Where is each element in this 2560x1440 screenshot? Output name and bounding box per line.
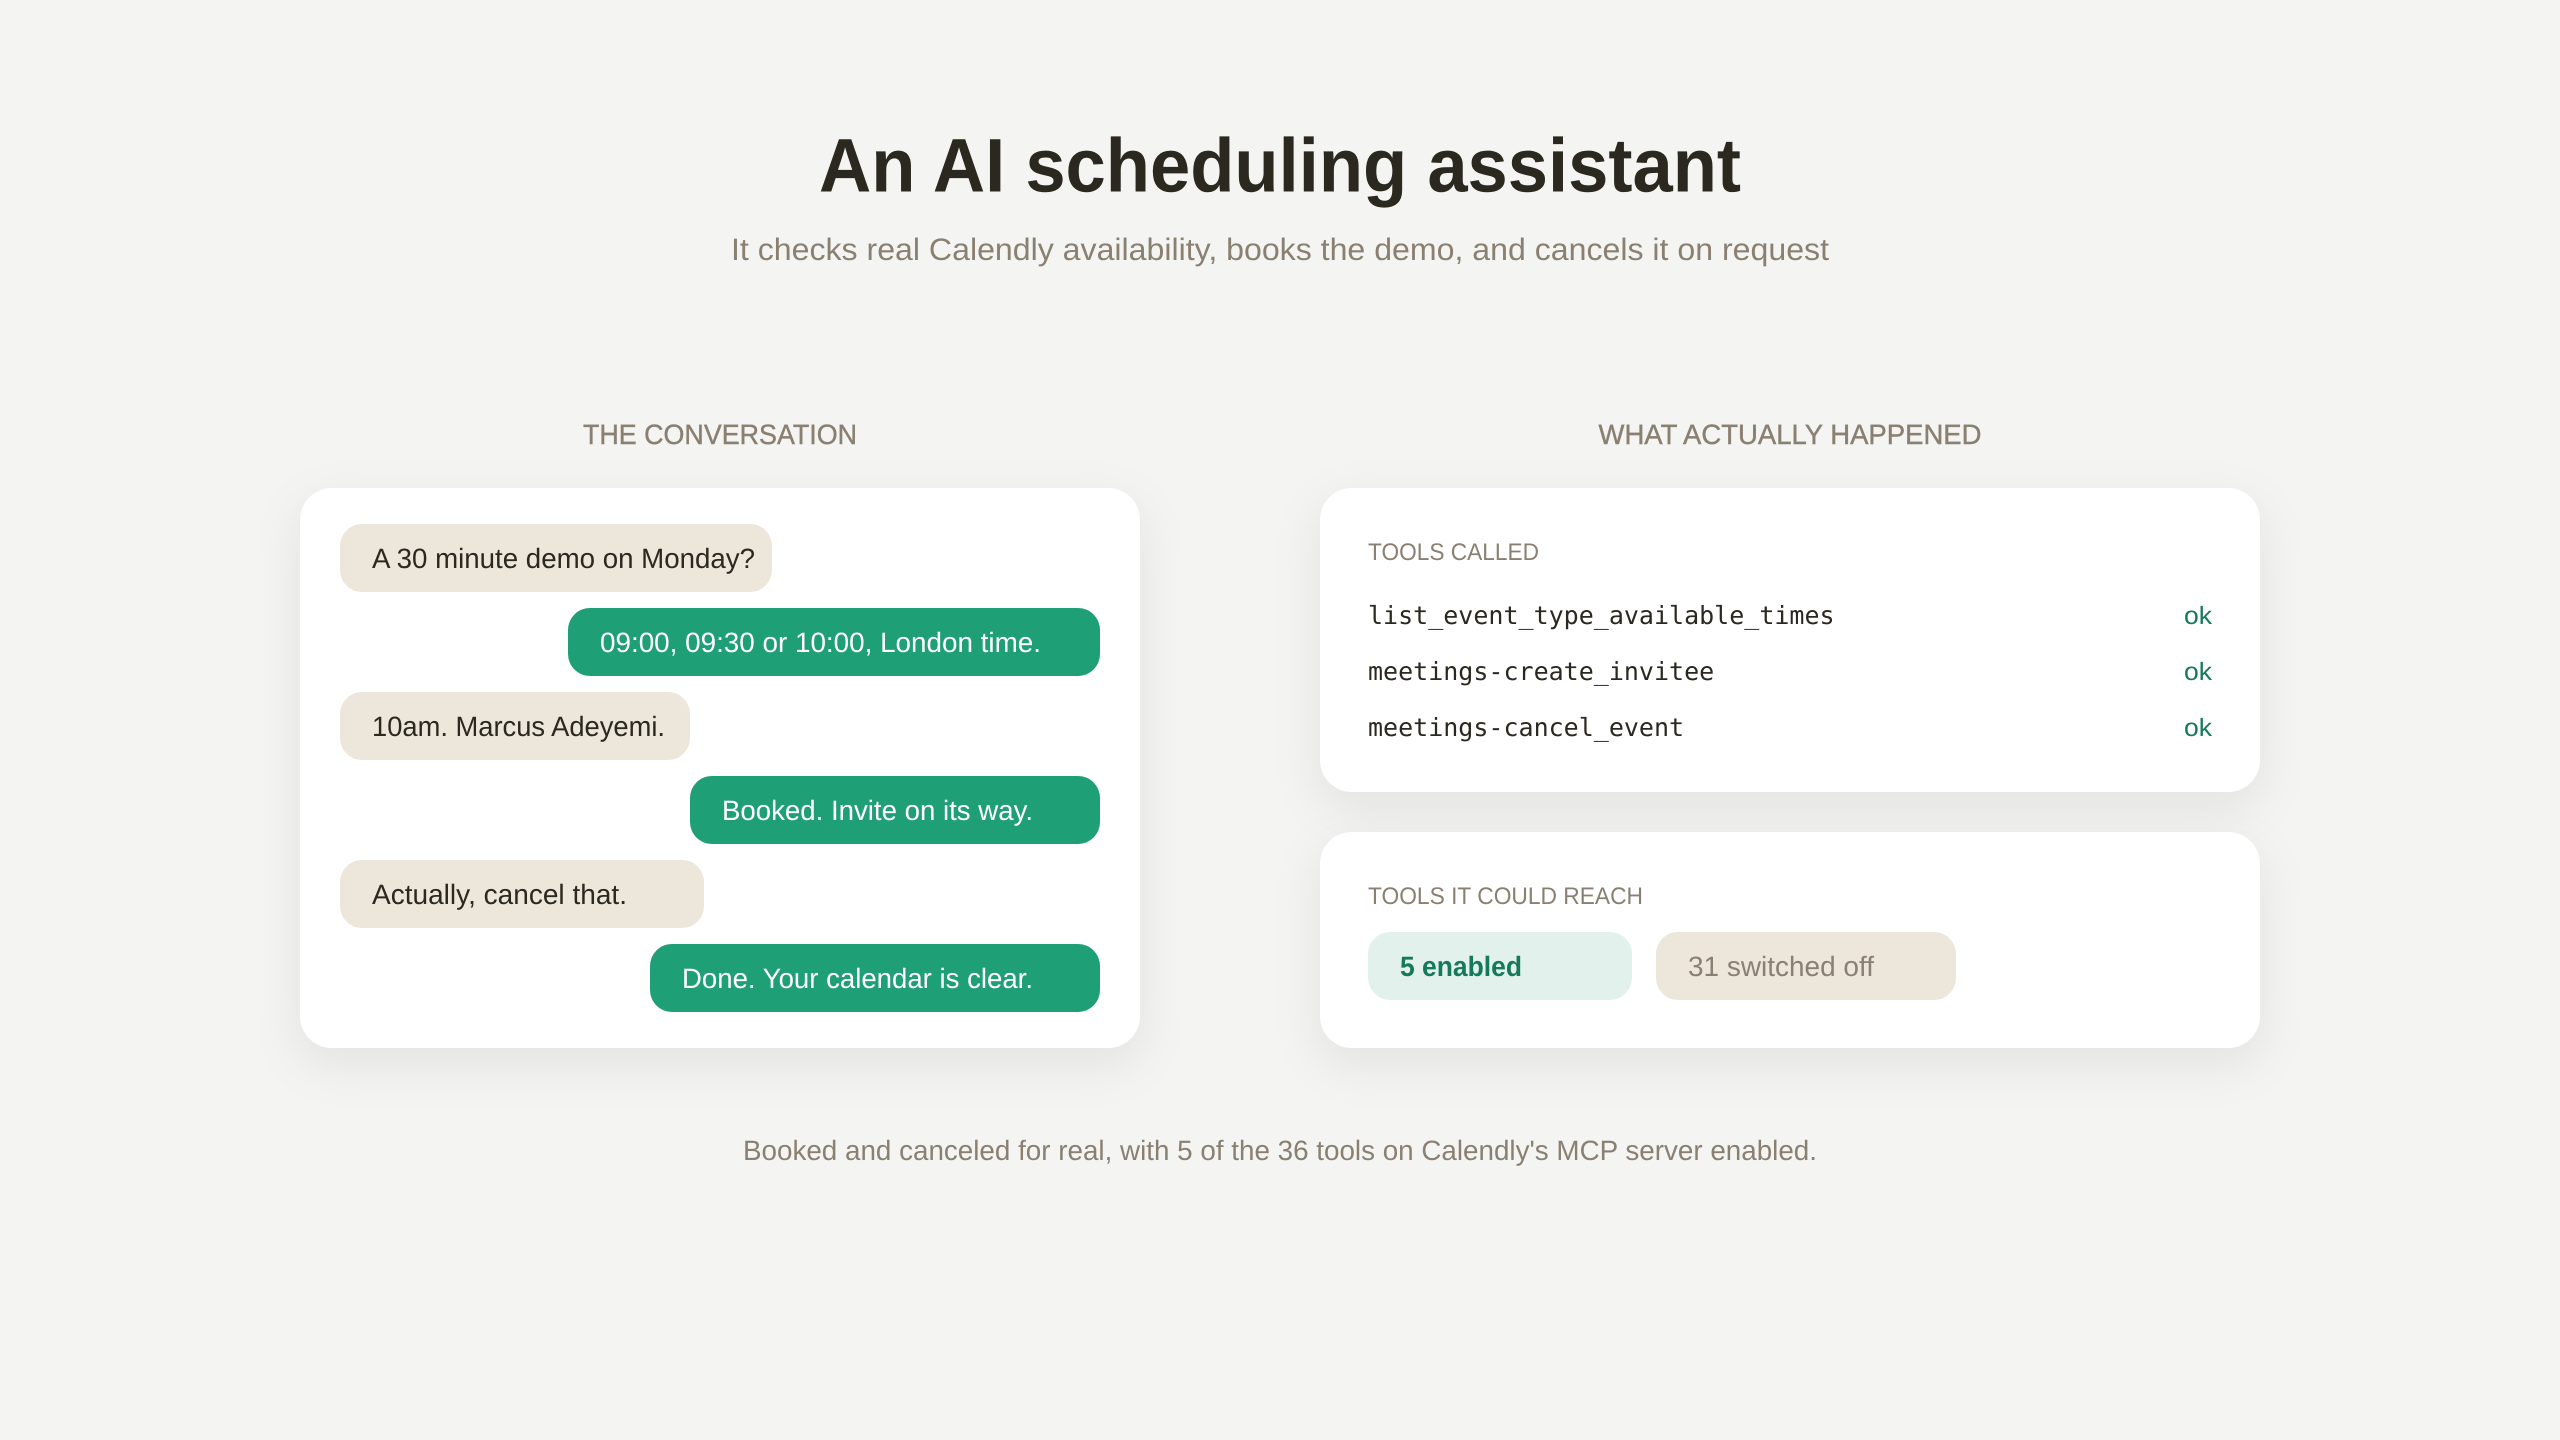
panel: conversation [300,488,1140,1048]
heading: what actually happened: WHAT ACTUALLY HAPPENED [1598,419,1982,450]
user bubble 3: Actually, cancel that. [372,879,627,910]
tool row 1: list_event_type_available_times [1368,601,1835,630]
user bubble 1 [340,524,772,592]
footer note: Booked and canceled for real, with 5 of the 36 tools on Calendly's MCP server enabled. [743,1135,1817,1166]
panel: tools called [1320,488,2260,792]
assistant bubble 2: Booked. Invite on its way. [722,795,1033,826]
assistant bubble 3: Done. Your calendar is clear. [682,963,1033,994]
tool row 3: ok [2184,714,2213,742]
label: tools called: TOOLS CALLED [1368,539,1539,566]
user bubble 2: 10am. Marcus Adeyemi. [372,711,665,742]
assistant bubble 2 [690,776,1100,844]
tool row 1 [1368,601,2213,630]
tool row 2: meetings-create_invitee [1368,657,1714,686]
tool row 2: ok [2184,658,2213,686]
user bubble 1: A 30 minute demo on Monday? [372,543,755,574]
title: An AI scheduling assistant [819,124,1741,208]
user bubble 3 [340,860,704,928]
pill: 5 enabled [1368,932,1632,1000]
tool row 3: meetings-cancel_event [1368,713,1684,742]
tool row 2 [1368,657,2213,686]
label: tools it could reach: TOOLS IT COULD REACH [1368,883,1643,910]
pill: 31 switched off [1656,932,1956,1000]
tool row 1: ok [2184,602,2213,630]
pill: 31 switched off: 31 switched off [1688,951,1874,982]
pill: 5 enabled: 5 enabled [1400,951,1522,982]
tool row 3 [1368,713,2213,742]
assistant bubble 3 [650,944,1100,1012]
heading: the conversation: THE CONVERSATION [583,419,857,450]
assistant bubble 1: 09:00, 09:30 or 10:00, London time. [600,627,1041,658]
assistant bubble 1 [568,608,1100,676]
user bubble 2 [340,692,690,760]
subtitle: It checks real Calendly availability, books the demo, and cancels it on request [731,232,1829,267]
panel: tools it could reach [1320,832,2260,1048]
